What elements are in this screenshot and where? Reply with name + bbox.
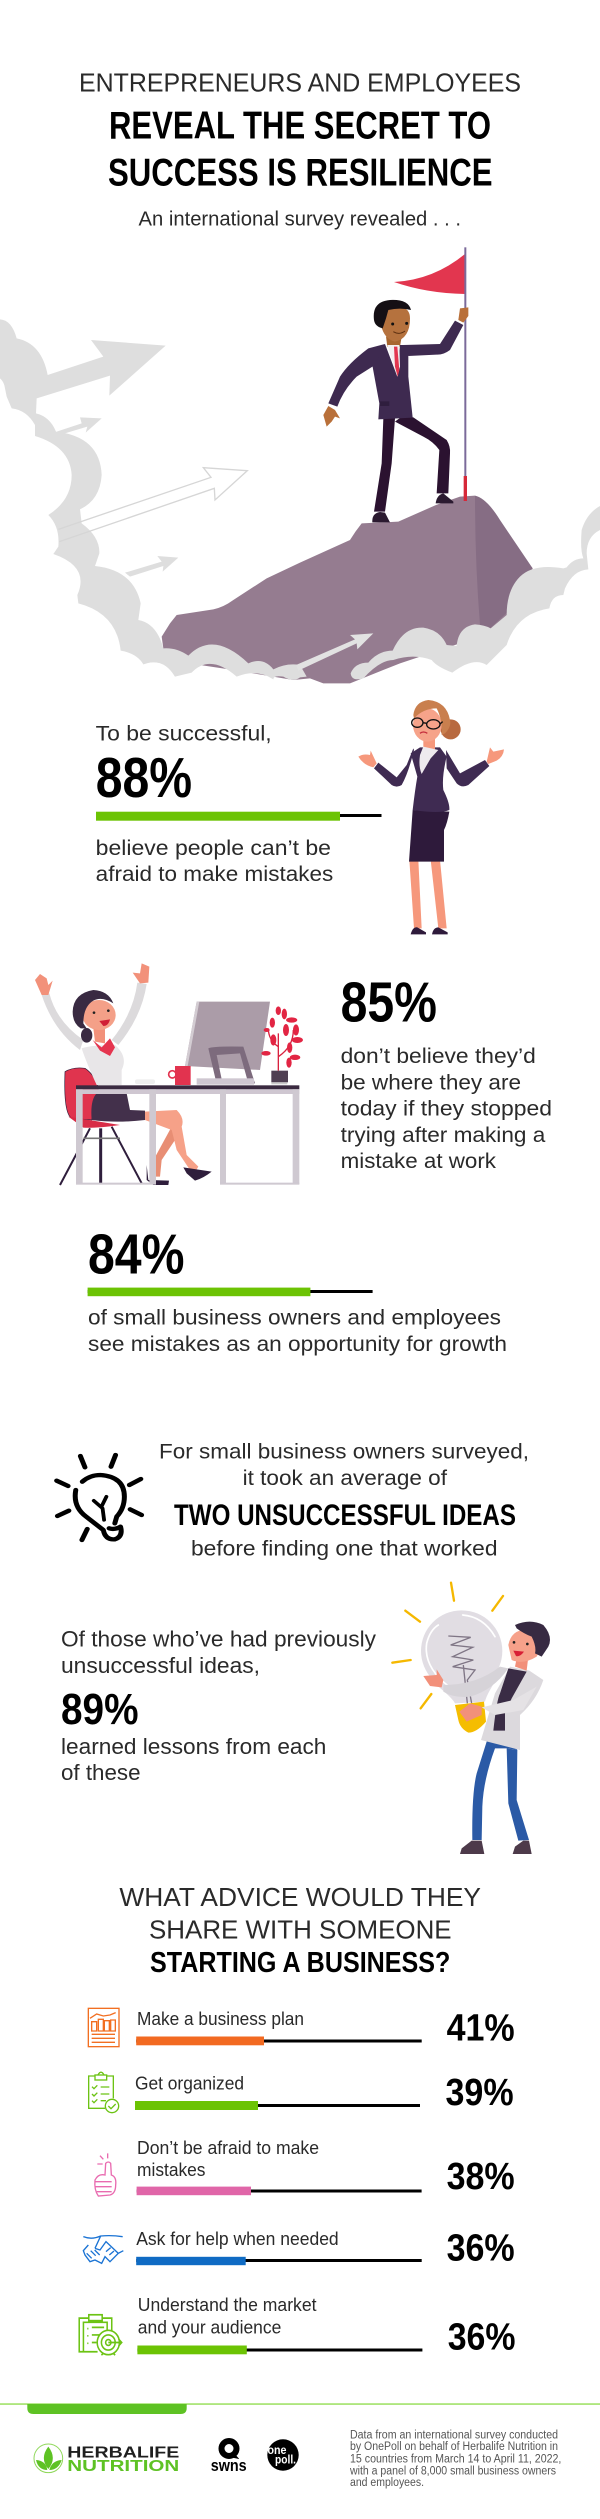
logo: Herbalife Nutrition [34, 2444, 180, 2475]
advice row: mistakes: 38% [447, 2156, 515, 2198]
source note: 15 countries from March 14 to April 11, 2022, [350, 2453, 561, 2465]
illustration: mountain summit scene [0, 247, 600, 683]
head [515, 1657, 528, 1671]
title: ENTREPRENEURS AND EMPLOYEES [79, 68, 521, 98]
jacket [372, 344, 413, 419]
source note: and employees. [350, 2477, 424, 2489]
illustration: man holding lightbulb [392, 1583, 550, 1854]
stat: 89%: learned lessons from each [61, 1734, 326, 1759]
stat: 84%: 84% [88, 1222, 184, 1286]
logo: swns [211, 2441, 247, 2475]
advice row: get organized: Get organized [135, 2072, 244, 2094]
arrow: small grey [57, 417, 102, 435]
stat: 88%: afraid to make mistakes [96, 862, 333, 886]
advice row: ask for help: 36% [447, 2228, 515, 2270]
advice row: understand the market: 36% [448, 2317, 516, 2359]
stat: 89% [61, 1627, 376, 1785]
neck [386, 337, 402, 347]
stat: 85% [341, 970, 552, 1173]
illustration: woman shrugging [358, 700, 504, 934]
advice row: mistakes: Don’t be afraid to make [137, 2137, 319, 2158]
advice row: business plan: Make a business plan [137, 2008, 304, 2029]
advice row: mistakes [95, 2137, 515, 2198]
advice row: understand the market: Understand the market [138, 2294, 316, 2315]
stat: 88% [96, 722, 381, 886]
title: REVEAL THE SECRET TO [109, 104, 491, 147]
stat: 84%: of small business owners and employees [88, 1306, 501, 1330]
source note: with a panel of 8,000 small business owners [349, 2466, 556, 2478]
flag [394, 254, 465, 294]
rays [392, 1583, 503, 1708]
stat: 88%: believe people can’t be [96, 836, 331, 860]
stat: 85%: 85% [341, 970, 437, 1034]
head [380, 307, 410, 342]
hands [423, 1669, 482, 1722]
subtitle: An international survey revealed . . . [138, 208, 461, 230]
chair [65, 1068, 98, 1120]
logo: Herbalife Nutrition: HERBALIFE [67, 2444, 180, 2461]
hands [323, 406, 340, 427]
icon: clipboard and target [79, 2315, 122, 2355]
illustration: woman celebrating at desk [35, 963, 303, 1185]
logo: Herbalife Nutrition: NUTRITION [67, 2458, 179, 2475]
advice row: business plan [88, 2008, 515, 2050]
advice row: get organized [89, 2072, 514, 2114]
trousers [472, 1732, 517, 1840]
icon: checklist [89, 2072, 119, 2113]
heading: advice: SHARE WITH SOMEONE [149, 1915, 452, 1945]
desk [76, 1085, 299, 1089]
arrow: outlined [58, 468, 247, 542]
icon: handshake [83, 2236, 123, 2263]
arrow: lower grey [125, 556, 178, 577]
text block: two unsuccessful ideas [159, 1441, 529, 1561]
heading: advice: WHAT ADVICE WOULD THEY [119, 1882, 481, 1912]
advice row: ask for help [83, 2228, 515, 2270]
monitor [185, 1002, 270, 1070]
jacket [481, 1667, 543, 1750]
advice row: mistakes: mistakes [137, 2159, 206, 2180]
torso and arms [42, 983, 147, 1050]
right cloud [351, 506, 600, 679]
man with flag [323, 247, 468, 522]
stat: 88%: 88% [96, 746, 192, 810]
mountain [143, 496, 600, 683]
icon: thumbs up [95, 2153, 116, 2196]
arrow: large grey [37, 340, 166, 398]
stat: 85%: trying after making a [341, 1123, 545, 1147]
stat: 89%: Of those who’ve had previously [61, 1627, 376, 1652]
stat: 84%: see mistakes as an opportunity for growth [88, 1332, 507, 1356]
mug [175, 1066, 191, 1085]
plant [268, 1028, 293, 1071]
stat: 84% [88, 1222, 507, 1356]
shoes [460, 1841, 532, 1854]
icon: report chart [88, 2008, 119, 2047]
bottom left cloud [143, 644, 307, 680]
stat: 85%: mistake at work [341, 1149, 496, 1173]
logo: swns: swns [211, 2456, 247, 2475]
left cloud band [0, 319, 247, 677]
advice row: ask for help: Ask for help when needed [136, 2228, 339, 2249]
text block: two unsuccessful ideas: it took an average of [243, 1467, 447, 1490]
shirt and tie [387, 345, 400, 377]
arrow on mountain [296, 633, 373, 671]
stat: 88%: To be successful, [96, 722, 272, 745]
source note: Data from an international survey conducted [350, 2429, 558, 2441]
advice row: understand the market [79, 2294, 516, 2359]
logo: onepoll [267, 2439, 299, 2471]
advice row: get organized: 39% [446, 2072, 514, 2114]
logo: onepoll: one [268, 2443, 287, 2457]
hands [35, 963, 149, 995]
text block: two unsuccessful ideas: For small business owners surveyed, [159, 1441, 529, 1464]
stat: 89%: of these [61, 1760, 140, 1785]
advice row: business plan: 41% [447, 2008, 515, 2050]
head [93, 1028, 105, 1043]
trousers [374, 418, 395, 512]
title [79, 68, 521, 194]
heading: advice: STARTING A BUSINESS? [150, 1947, 450, 1979]
footer rule and tab [0, 2403, 600, 2414]
shoes [372, 512, 390, 522]
stat: 89%: unsuccessful ideas, [61, 1653, 260, 1678]
icon: lightbulb [57, 1455, 142, 1540]
stat: 85%: be where they are [341, 1070, 521, 1094]
source note: by OnePoll on behalf of Herbalife Nutrition in [350, 2441, 558, 2453]
text block: two unsuccessful ideas: TWO UNSUCCESSFUL IDEAS [174, 1499, 516, 1532]
stat: 89%: 89% [61, 1685, 138, 1734]
stat: 85%: today if they stopped [341, 1097, 552, 1121]
logo: onepoll: poll. [275, 2452, 296, 2466]
text block: two unsuccessful ideas: before finding one that worked [191, 1538, 498, 1561]
legs [152, 1127, 182, 1177]
stat: 85%: don’t believe they’d [341, 1044, 536, 1068]
skirt [91, 1093, 145, 1122]
source note [349, 2429, 561, 2489]
advice row: understand the market: and your audience [138, 2317, 281, 2338]
heading: advice [119, 1882, 481, 1979]
title: SUCCESS IS RESILIENCE [108, 151, 492, 194]
bulb [421, 1610, 502, 1692]
